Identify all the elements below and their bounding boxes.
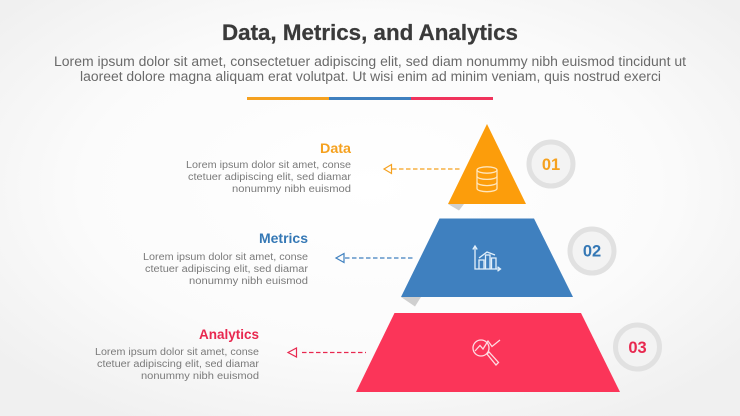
icon: database [477,167,497,192]
intro text: laoreet dolore magna aliquam erat volutpat. Ut wisi enim ad minim veniam, quis nostrud exerci [80,69,661,84]
number badge: 02: 02 [583,242,601,260]
description: data [186,160,352,195]
pyramid tier: analytics [356,313,620,392]
panel: metrics tier [143,218,614,306]
tricolor divider [247,97,493,100]
description: analytics [95,347,260,382]
heading: analytics: Analytics [199,326,259,342]
description: analytics: ctetuer adipiscing elit, sed diamar [97,359,260,370]
panel: data tier [186,124,573,210]
description: metrics: ctetuer adipiscing elit, sed diamar [145,264,309,275]
number badge: 01 [529,142,573,186]
number badge: 03: 03 [628,339,647,357]
fold shadow: metrics tier [401,297,421,306]
number badge: 01: 01 [542,156,560,174]
description: data: Lorem ipsum dolor sit amet, conse [186,160,351,171]
title: Data, Metrics, and Analytics [222,20,518,45]
description: metrics [143,252,309,287]
icon: bar chart [473,246,500,271]
pyramid tier: metrics [401,218,573,297]
fold shadow: data tier [448,204,464,210]
intro text [54,54,686,84]
number badge: 02 [570,229,614,273]
arrow: data [384,164,462,174]
description: data: nonummy nibh euismod [232,184,351,195]
description: analytics: nonummy nibh euismod [141,371,259,382]
description: metrics: Lorem ipsum dolor sit amet, conse [143,252,308,263]
icon: magnifier with trend line [473,340,500,365]
description: metrics: nonummy nibh euismod [189,276,308,287]
arrow: metrics [336,254,414,262]
pyramid tier: data [448,124,526,204]
heading: data: Data [320,140,351,156]
number badge: 03 [616,325,660,369]
arrow: analytics [288,348,366,357]
heading: metrics: Metrics [259,230,308,246]
intro text: Lorem ipsum dolor sit amet, consectetuer adipiscing elit, sed diam nonummy nibh euismod tincidunt ut [54,54,686,69]
panel: analytics tier [95,313,660,392]
description: analytics: Lorem ipsum dolor sit amet, conse [95,347,259,358]
description: data: ctetuer adipiscing elit, sed diamar [188,172,352,183]
